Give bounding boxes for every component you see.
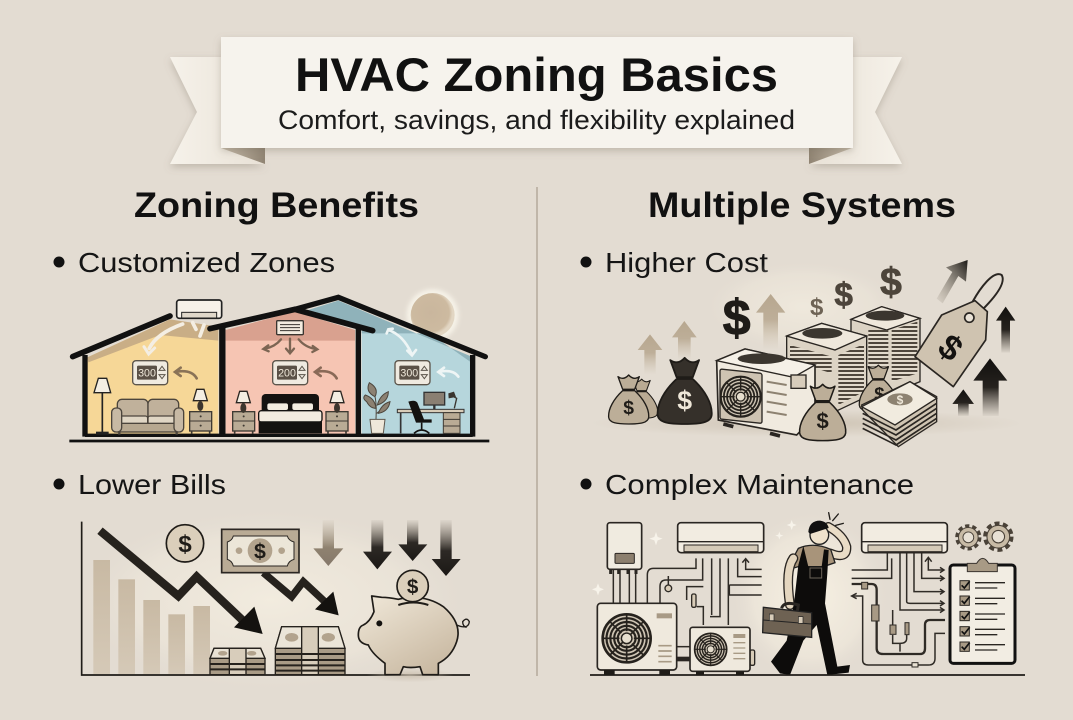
banner panel [221,37,853,148]
bed [259,394,322,433]
thermostat: zone 1 [133,361,168,385]
back condenser unit [851,307,920,397]
money bag: back small [859,365,897,412]
bullet: higher cost: Higher Cost [605,247,768,278]
second falling arrow [263,573,339,615]
middle condenser unit [787,323,867,412]
house frame [69,297,489,441]
title: HVAC Zoning Basics [295,48,778,101]
airflow arrows: zone 2 [263,339,317,353]
floor lamp [94,378,111,435]
airflow arrows: zone 3 [387,329,416,355]
pipes: left side [613,558,762,647]
axes [82,522,470,675]
dollar signs: $ [880,260,902,304]
technician [763,513,850,675]
money bags: left group [609,375,658,424]
piggy bank [358,596,469,682]
shirt [787,545,835,570]
rising arrows [638,260,1015,416]
subtitle: Comfort, savings, and flexibility explained [278,105,795,135]
complex maintenance illustration [590,510,1025,683]
glow [730,510,890,683]
thermostat: zone 3: 300 [400,368,418,380]
small outdoor unit [677,627,755,675]
pipe gauge [665,585,696,607]
cash stack: $ [897,393,904,407]
zone 3: office [308,301,470,435]
potted plant [364,383,390,433]
front outdoor unit [717,349,815,436]
ribbon folds [221,148,852,164]
head [810,526,829,544]
nightstand and lamp: living room [190,389,212,434]
airflow arrows: zone 1 [144,323,204,354]
coin above piggy bank [397,570,428,602]
sparkles [592,520,797,595]
coin: $ [178,531,192,558]
large outdoor unit [597,603,677,675]
thermostat: zone 2 [273,361,308,385]
wall AC unit [177,300,222,318]
thermostat arrows [175,368,458,378]
coin above piggy bank: $ [407,575,419,598]
checklist [960,581,1005,651]
dollar signs [723,260,902,346]
dollar signs: $ [834,277,853,314]
money bag: dark: $ [677,385,692,415]
money bag: front: $ [817,408,829,433]
higher cost illustration [590,260,1023,447]
sun [407,289,459,341]
heading: zoning benefits: Zoning Benefits [134,186,419,225]
ground shadow [590,409,1023,437]
large cash stack [275,627,345,675]
zone 2: bedroom [226,312,355,435]
pipe fittings [862,582,918,667]
motion marks [829,513,843,525]
money bag: front [800,384,846,441]
cash stack [862,382,937,447]
glow [70,507,470,693]
clipboard [950,558,1015,663]
toolbox [782,603,798,612]
money bags: left group: $ [623,398,634,419]
bullet: complex maintenance: Complex Maintenance [605,469,914,500]
house zoning illustration [69,289,489,441]
sofa [112,399,184,435]
control box [607,523,642,574]
overalls [771,546,850,675]
office desk [397,392,464,433]
floor line [590,672,1025,677]
nightstands and lamps: bedroom [233,391,348,434]
down arrows [313,520,461,576]
price tag: $ [931,327,970,369]
wall unit: left [678,523,764,553]
money bag: dark [658,358,712,424]
bullet: lower bills: Lower Bills [78,469,226,500]
thermostat: zone 1: 300 [138,368,156,380]
lower bills illustration [70,507,470,693]
thermostat: zone 2: 200 [278,368,296,380]
bullet: customized zones: Customized Zones [78,247,335,278]
title banner [170,37,902,164]
coin [166,525,204,562]
heading: multiple systems: Multiple Systems [648,186,956,225]
thermostat: zone 3 [395,361,430,385]
wall unit: right [862,523,947,553]
dollar signs: $ [810,294,823,321]
ceiling vent [277,321,303,335]
gear: small [957,526,979,548]
glow [703,260,903,353]
lowered arm [788,558,793,605]
gear: large [985,524,1011,549]
money bag: back small: $ [874,384,884,405]
office chair [408,401,432,433]
pipes: right side [852,553,945,665]
small cash stack [210,648,265,675]
bar chart [93,560,210,674]
raised arm [828,527,847,556]
falling trend arrow [100,531,263,634]
dollar signs: $ [723,290,751,346]
center divider [536,187,538,676]
banknote [222,529,299,573]
price tag [915,274,1003,387]
zone 1: living room [87,319,218,435]
ribbon tails [170,57,902,164]
banknote: $ [254,539,266,563]
